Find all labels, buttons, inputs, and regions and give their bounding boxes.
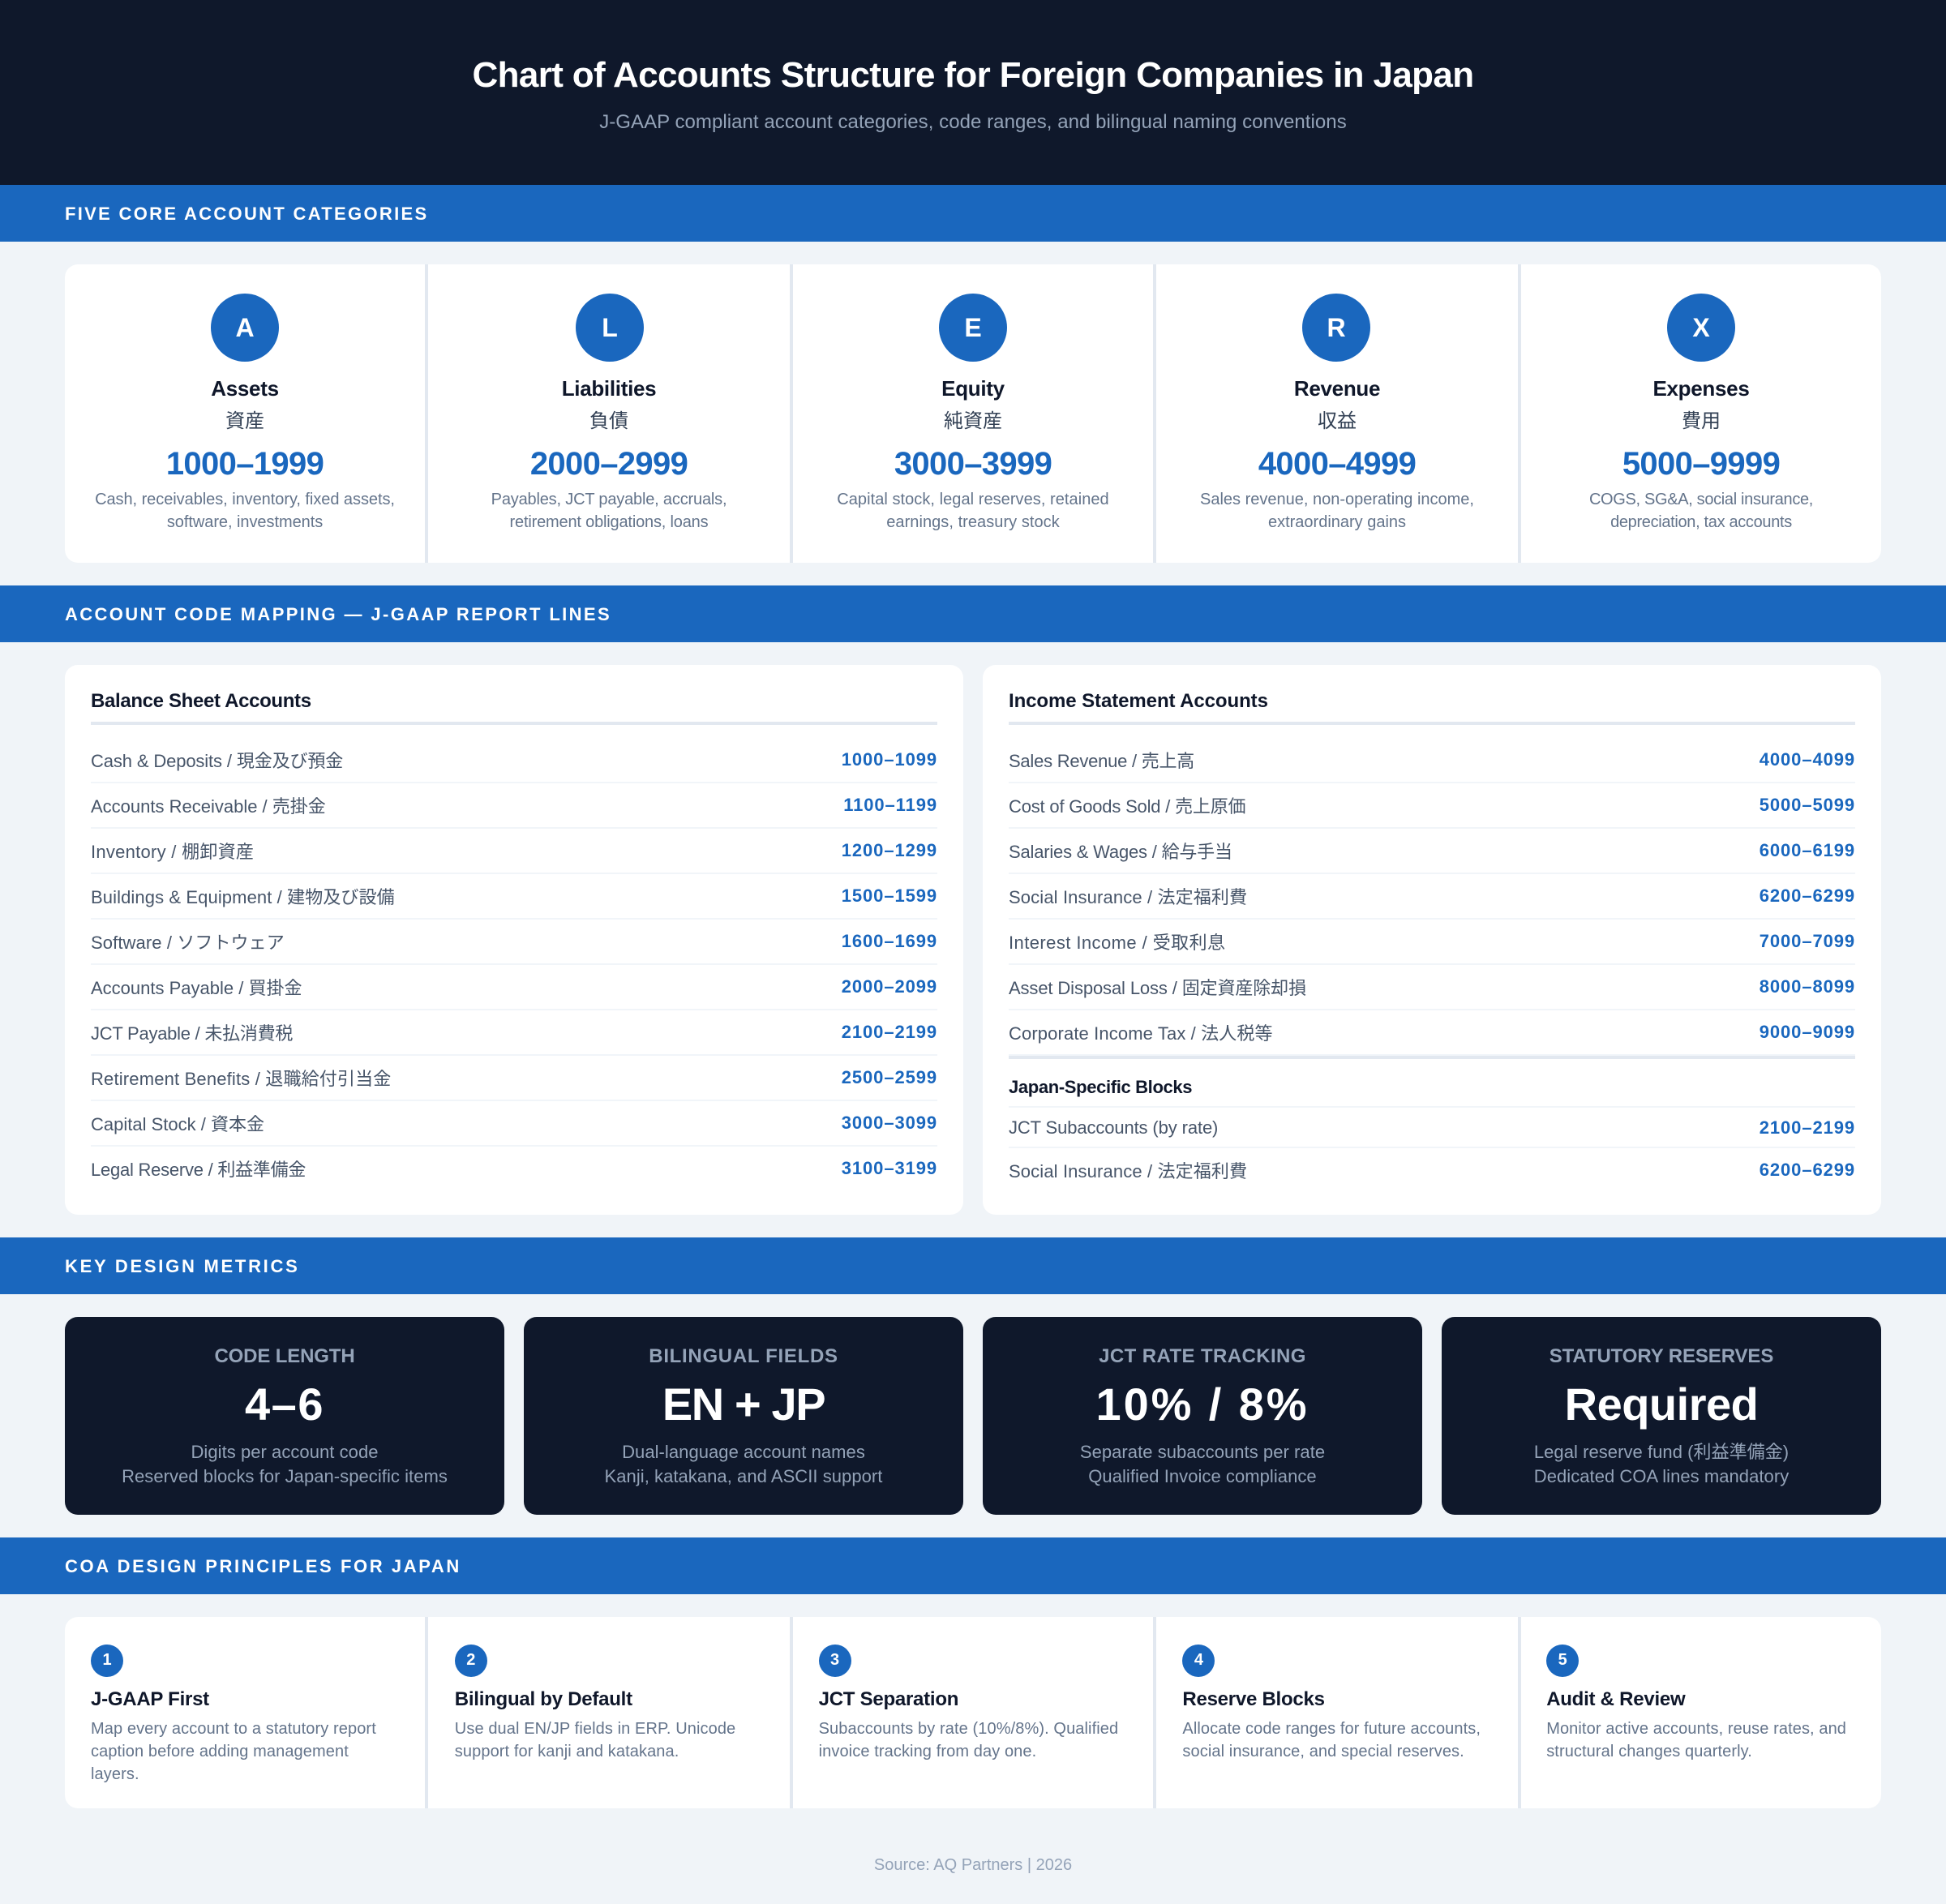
principle 3: JCT Separation — [819, 1688, 958, 1710]
metric card: statutory reserves: STATUTORY RESERVES — [1550, 1345, 1773, 1367]
panel: income statement accounts — [983, 665, 1881, 1215]
principle 5: 5 — [1558, 1651, 1567, 1669]
category: liabilities: retirement obligations, loans — [510, 513, 708, 531]
metric card: jct rate tracking: JCT RATE TRACKING — [1099, 1345, 1306, 1367]
section heading: account code mapping: ACCOUNT CODE MAPPING — J-GAAP REPORT LINES — [65, 604, 611, 624]
panel: balance sheet accounts: JCT Payable / 未払消費税 — [91, 1023, 293, 1044]
category: liabilities: L — [602, 313, 618, 342]
panel: income statement accounts: 6000–6199 — [1760, 840, 1855, 860]
metric card: jct rate tracking: 10% / 8% — [1096, 1379, 1309, 1430]
principle 5: Audit & Review — [1546, 1688, 1685, 1710]
panel: balance sheet accounts: 2000–2099 — [842, 976, 937, 997]
panel: balance sheet accounts — [65, 665, 963, 1215]
panel: balance sheet accounts: 1500–1599 — [842, 886, 937, 906]
panel: income statement accounts: Salaries & Wages / 給与手当 — [1009, 842, 1232, 862]
category: revenue: Sales revenue, non-operating income, — [1200, 491, 1474, 508]
principle 3: invoice tracking from day one. — [819, 1743, 1036, 1760]
principle 4 — [1156, 1617, 1518, 1808]
category: equity: 3000–3999 — [894, 446, 1052, 482]
category: assets: Assets — [211, 376, 279, 401]
panel: income statement accounts: 6200–6299 — [1760, 886, 1855, 906]
metric card: bilingual fields: EN + JP — [662, 1379, 825, 1430]
panel: income statement accounts: Sales Revenue / 売上高 — [1009, 751, 1194, 771]
category: liabilities: Liabilities — [562, 376, 656, 401]
category: assets: 1000–1999 — [166, 446, 324, 482]
principle 2: support for kanji and katakana. — [455, 1743, 679, 1760]
category: expenses: 費用 — [1682, 410, 1721, 432]
category: liabilities: 2000–2999 — [530, 446, 688, 482]
panel: balance sheet accounts: 1600–1699 — [842, 931, 937, 951]
category: equity: Capital stock, legal reserves, retained — [837, 491, 1109, 508]
section heading: key design metrics — [0, 1237, 1946, 1294]
panel: income statement accounts: Asset Disposal Loss / 固定資産除却損 — [1009, 978, 1306, 998]
principle 2 — [428, 1617, 790, 1808]
principle 5: Monitor active accounts, reuse rates, and — [1546, 1720, 1846, 1738]
panel: balance sheet accounts: 3100–3199 — [842, 1158, 937, 1178]
category: revenue — [1156, 264, 1518, 563]
category: equity: earnings, treasury stock — [886, 513, 1060, 531]
principle 5: structural changes quarterly. — [1546, 1743, 1752, 1760]
category: equity — [793, 264, 1153, 563]
panel: five account categories — [65, 264, 1881, 563]
metric card: statutory reserves: Legal reserve fund (利益準備金) — [1534, 1442, 1789, 1462]
category: revenue: 収益 — [1318, 410, 1357, 432]
category: revenue: R — [1327, 313, 1346, 342]
principle 4: 4 — [1194, 1651, 1203, 1669]
category: equity: Equity — [941, 376, 1005, 401]
principle 5 — [1521, 1617, 1881, 1808]
panel: balance sheet accounts: Retirement Benefits / 退職給付引当金 — [91, 1069, 391, 1089]
panel: income statement accounts: 2100–2199 — [1760, 1117, 1855, 1138]
category: expenses: 5000–9999 — [1622, 446, 1780, 482]
category: equity: 純資産 — [944, 410, 1002, 432]
category: revenue: Revenue — [1294, 376, 1380, 401]
category: expenses — [1521, 264, 1881, 563]
principle 3: Subaccounts by rate (10%/8%). Qualified — [819, 1720, 1118, 1738]
principle 1: J-GAAP First — [91, 1688, 209, 1710]
panel: income statement accounts: 8000–8099 — [1760, 976, 1855, 997]
panel: design principles — [65, 1617, 1881, 1808]
principle 1: layers. — [91, 1765, 139, 1783]
category: liabilities — [428, 264, 790, 563]
panel: income statement accounts: JCT Subaccounts (by rate) — [1009, 1117, 1218, 1138]
principle 3: 3 — [830, 1651, 839, 1669]
panel: balance sheet accounts: Cash & Deposits / 現金及び預金 — [91, 751, 343, 771]
panel: income statement accounts: Social Insurance / 法定福利費 — [1009, 887, 1247, 907]
category: expenses: X — [1692, 313, 1710, 342]
category: equity: E — [964, 313, 982, 342]
section heading: five core account categories: FIVE CORE ACCOUNT CATEGORIES — [65, 204, 428, 224]
category: assets: A — [235, 313, 255, 342]
table heading: Balance Sheet Accounts — [91, 690, 311, 712]
panel: balance sheet accounts: Accounts Payable / 買掛金 — [91, 978, 302, 998]
panel: balance sheet accounts: Buildings & Equipment / 建物及び設備 — [91, 887, 395, 907]
subheading: japan-specific blocks: Japan-Specific Blocks — [1009, 1077, 1192, 1097]
metric card: bilingual fields — [524, 1317, 963, 1515]
panel: balance sheet accounts: 2100–2199 — [842, 1022, 937, 1042]
principle 2: Use dual EN/JP fields in ERP. Unicode — [455, 1720, 735, 1738]
subtitle: J-GAAP compliant account categories, code ranges, and bilingual naming conventions — [599, 111, 1347, 133]
panel: balance sheet accounts: Software / ソフトウェア — [91, 933, 285, 953]
panel: income statement accounts: 5000–5099 — [1760, 795, 1855, 815]
panel: balance sheet accounts: Inventory / 棚卸資産 — [91, 842, 254, 862]
category: expenses: Expenses — [1652, 376, 1750, 401]
category: assets: 資産 — [225, 410, 264, 432]
metric card: bilingual fields: Kanji, katakana, and ASCII support — [605, 1466, 882, 1486]
panel: balance sheet accounts: Accounts Receivable / 売掛金 — [91, 796, 326, 817]
principle 1 — [65, 1617, 425, 1808]
panel: income statement accounts: Corporate Income Tax / 法人税等 — [1009, 1023, 1273, 1044]
principle 1: Map every account to a statutory report — [91, 1720, 376, 1738]
principle 4: Allocate code ranges for future accounts, — [1182, 1720, 1481, 1738]
panel: balance sheet accounts: Capital Stock / 資本金 — [91, 1114, 264, 1134]
metric card: code length: Digits per account code — [191, 1442, 379, 1462]
metric card: statutory reserves: Dedicated COA lines mandatory — [1534, 1466, 1789, 1486]
title: Chart of Accounts Structure for Foreign Companies in Japan — [473, 55, 1473, 95]
header band — [0, 0, 1946, 185]
panel: balance sheet accounts: 1100–1199 — [843, 795, 937, 815]
category: assets: software, investments — [167, 513, 323, 531]
metric card: statutory reserves — [1442, 1317, 1881, 1515]
panel: income statement accounts: 4000–4099 — [1760, 749, 1855, 770]
metric card: bilingual fields: BILINGUAL FIELDS — [649, 1345, 838, 1367]
principle 4: social insurance, and special reserves. — [1182, 1743, 1464, 1760]
section heading: coa design principles — [0, 1537, 1946, 1594]
category: expenses: depreciation, tax accounts — [1610, 513, 1792, 531]
principle 2: Bilingual by Default — [455, 1688, 632, 1710]
panel: balance sheet accounts: 1200–1299 — [842, 840, 937, 860]
source footer: Source: AQ Partners | 2026 — [874, 1856, 1072, 1874]
principle 2: 2 — [466, 1651, 475, 1669]
metric card: code length: 4–6 — [245, 1379, 324, 1430]
metric card: jct rate tracking: Qualified Invoice compliance — [1088, 1466, 1317, 1486]
table heading: Income Statement Accounts — [1009, 690, 1268, 712]
panel: income statement accounts: Cost of Goods Sold / 売上原価 — [1009, 796, 1245, 817]
panel: income statement accounts: Social Insurance / 法定福利費 — [1009, 1161, 1247, 1181]
category: revenue: extraordinary gains — [1268, 513, 1406, 531]
category: liabilities: Payables, JCT payable, accruals, — [491, 491, 727, 508]
panel: balance sheet accounts: 2500–2599 — [842, 1067, 937, 1087]
principle 1: 1 — [102, 1651, 112, 1669]
metric card: code length — [65, 1317, 504, 1515]
panel: income statement accounts: 6200–6299 — [1760, 1160, 1855, 1180]
principle 3 — [793, 1617, 1153, 1808]
section heading: coa design principles: COA DESIGN PRINCIPLES FOR JAPAN — [65, 1556, 461, 1576]
metric card: code length: Reserved blocks for Japan-specific items — [122, 1466, 448, 1486]
metric card: jct rate tracking: Separate subaccounts per rate — [1080, 1442, 1325, 1462]
section heading: five core account categories — [0, 185, 1946, 242]
panel: income statement accounts: 9000–9099 — [1760, 1022, 1855, 1042]
section heading: key design metrics: KEY DESIGN METRICS — [65, 1256, 300, 1276]
section heading: account code mapping — [0, 585, 1946, 642]
panel: income statement accounts: 7000–7099 — [1760, 931, 1855, 951]
principle 1: caption before adding management — [91, 1743, 349, 1760]
panel: balance sheet accounts: Legal Reserve / 利益準備金 — [91, 1160, 306, 1180]
metric card: bilingual fields: Dual-language account names — [622, 1442, 865, 1462]
principle 4: Reserve Blocks — [1182, 1688, 1325, 1710]
panel: balance sheet accounts: 3000–3099 — [842, 1113, 937, 1133]
category: assets: Cash, receivables, inventory, fixed assets, — [95, 491, 395, 508]
panel: income statement accounts: Interest Income / 受取利息 — [1009, 933, 1225, 953]
category: liabilities: 負債 — [589, 410, 628, 432]
panel: balance sheet accounts: 1000–1099 — [842, 749, 937, 770]
metric card: jct rate tracking — [983, 1317, 1422, 1515]
category: expenses: COGS, SG&A, social insurance, — [1589, 491, 1813, 508]
metric card: statutory reserves: Required — [1565, 1379, 1758, 1430]
metric card: code length: CODE LENGTH — [214, 1345, 355, 1367]
category: revenue: 4000–4999 — [1258, 446, 1416, 482]
category: assets — [65, 264, 425, 563]
